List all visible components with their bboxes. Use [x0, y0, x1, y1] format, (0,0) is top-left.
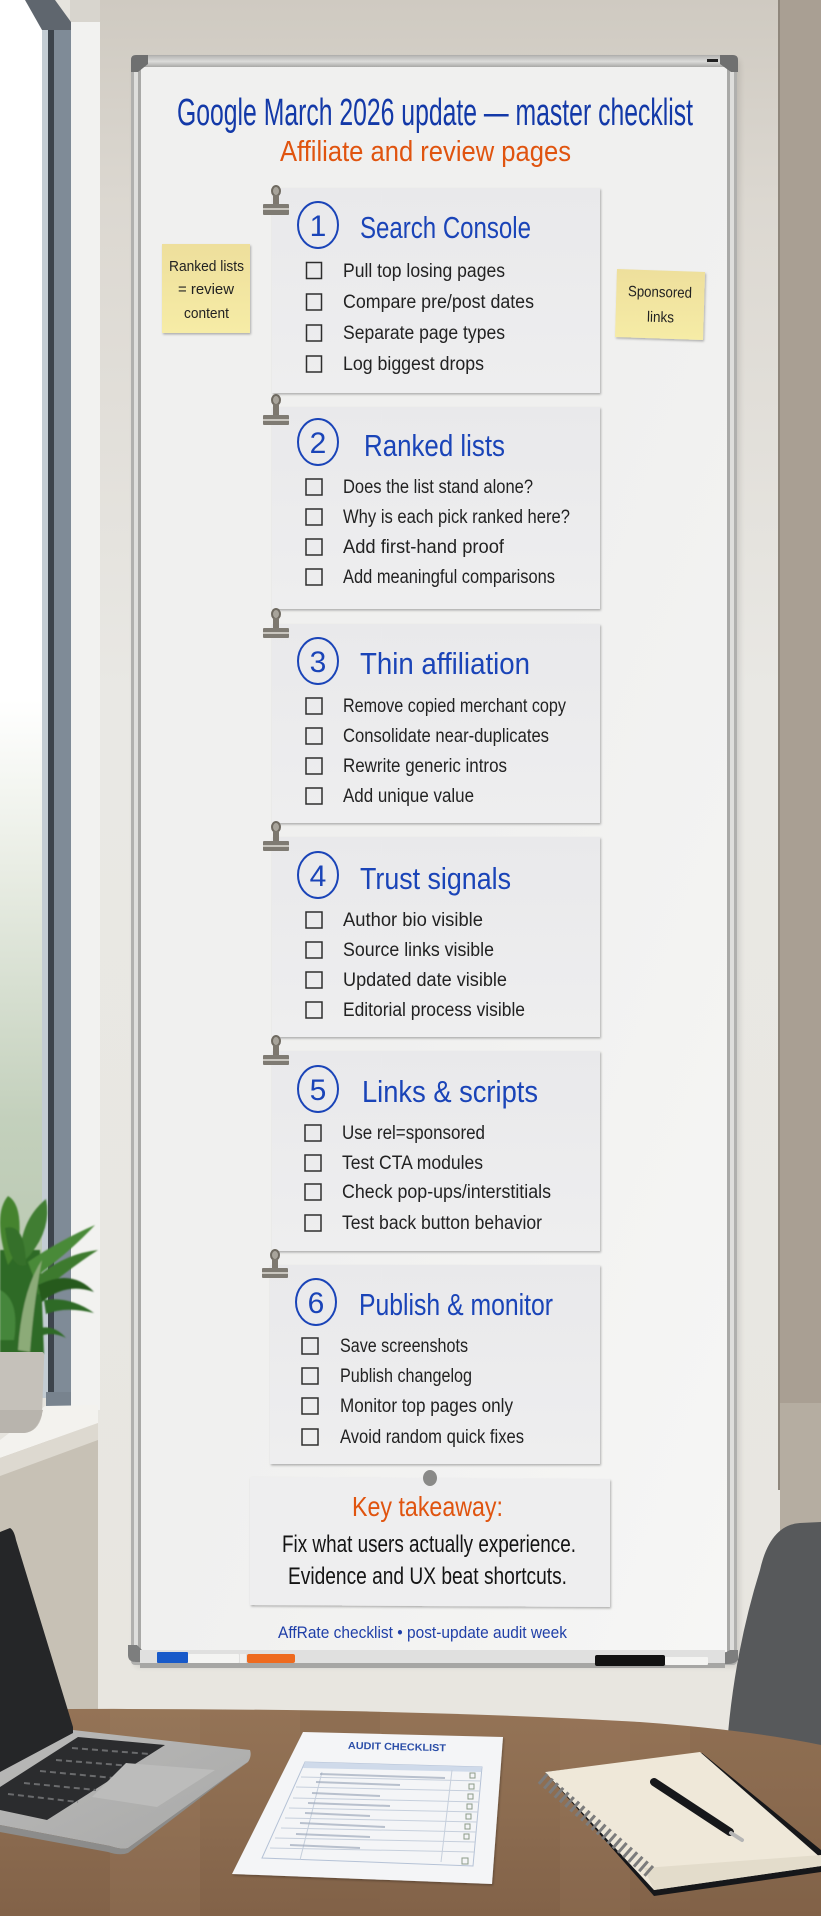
laptop screen — [0, 1528, 73, 1772]
checklist — [306, 261, 534, 375]
printed audit checklist: AUDIT CHECKLIST — [348, 1741, 446, 1754]
panel: key takeaway — [250, 1470, 610, 1607]
sticky note: ranked lists = review content: content — [184, 305, 230, 322]
laptop — [0, 1528, 251, 1854]
checklist: Save screenshots — [340, 1336, 468, 1357]
window sill and lower left wall — [0, 1405, 98, 1712]
checklist: Remove copied merchant copy — [343, 696, 566, 717]
sticky note: sponsored links — [615, 269, 705, 340]
sticky note: ranked lists = review content: = review — [178, 281, 234, 298]
printed audit checklist — [232, 1732, 503, 1884]
spiral notebook — [542, 1752, 821, 1896]
icon: binder clip — [263, 822, 289, 851]
checklist: Source links visible — [343, 940, 494, 961]
icon: binder clip — [263, 609, 289, 638]
checklist: Consolidate near-duplicates — [343, 726, 549, 747]
checklist: Compare pre/post dates — [343, 292, 534, 313]
panel: 1 Search Console — [263, 186, 600, 393]
heading: Thin affiliation — [360, 646, 530, 681]
checklist: Monitor top pages only — [340, 1396, 513, 1417]
sticky note: sponsored links: links — [647, 309, 674, 326]
checklist: Pull top losing pages — [343, 261, 505, 282]
checklist: Rewrite generic intros — [343, 756, 507, 777]
takeaway text — [282, 1531, 576, 1590]
checklist: Author bio visible — [343, 910, 483, 931]
marker tray with markers — [140, 1650, 725, 1668]
checklist: Add first-hand proof — [343, 537, 505, 558]
checklist: Test CTA modules — [342, 1153, 483, 1174]
panel: 5 Links & scripts — [263, 1036, 600, 1251]
panel: 3 Thin affiliation — [263, 609, 600, 823]
checklist: Check pop-ups/interstitials — [342, 1182, 551, 1203]
number badge 5: 5 — [310, 1074, 326, 1107]
takeaway text: Fix what users actually experience. — [282, 1531, 576, 1558]
number badge 6: 6 — [308, 1287, 324, 1320]
checklist: Updated date visible — [343, 970, 507, 991]
takeaway heading: Key takeaway: — [352, 1491, 503, 1522]
checklist: Why is each pick ranked here? — [343, 507, 570, 528]
number badge 3 — [298, 638, 338, 684]
sticky note: sponsored links: Sponsored — [628, 283, 692, 302]
checklist: Add unique value — [343, 786, 474, 807]
icon: binder clip — [263, 186, 289, 215]
window with frame — [0, 0, 100, 1410]
icon: potted plant — [0, 1196, 98, 1433]
subtitle: Affiliate and review pages — [280, 136, 571, 168]
marker: orange — [240, 1654, 295, 1663]
checklist: Test back button behavior — [342, 1213, 543, 1234]
heading: Links & scripts — [362, 1074, 538, 1109]
heading: Trust signals — [360, 861, 511, 896]
number badge 5 — [298, 1066, 338, 1112]
number badge 2: 2 — [310, 427, 326, 460]
checklist: Avoid random quick fixes — [340, 1427, 524, 1448]
icon: magnet pin — [423, 1470, 437, 1486]
laptop keyboard — [0, 1737, 165, 1820]
number badge 4: 4 — [310, 860, 326, 893]
checklist — [306, 696, 566, 807]
panel: 6 Publish & monitor — [262, 1250, 600, 1464]
office chair — [726, 1522, 821, 1760]
checklist: Publish changelog — [340, 1366, 472, 1387]
laptop trackpad — [92, 1763, 215, 1807]
number badge 4 — [298, 852, 338, 898]
checklist — [305, 1123, 551, 1234]
laptop base — [0, 1730, 251, 1849]
checklist — [306, 910, 525, 1021]
marker: black — [595, 1655, 708, 1666]
icon: binder clip — [263, 1036, 289, 1065]
checklist: Editorial process visible — [343, 1000, 525, 1021]
table — [0, 1705, 821, 1916]
checklist: Log biggest drops — [343, 354, 484, 375]
number badge 2 — [298, 419, 338, 465]
checklist: Use rel=sponsored — [342, 1123, 485, 1144]
icon: binder clip — [263, 395, 289, 425]
heading: Publish & monitor — [359, 1287, 553, 1322]
number badge 6 — [296, 1279, 336, 1325]
sticky note: ranked lists = review content: Ranked lists — [169, 258, 244, 275]
number badge 1 — [298, 202, 338, 248]
heading: Search Console — [360, 210, 531, 245]
footer note: AffRate checklist • post-update audit week — [278, 1623, 567, 1642]
checklist — [306, 477, 570, 588]
number badge 1: 1 — [310, 210, 326, 243]
marker: blue — [157, 1652, 239, 1663]
whiteboard — [128, 55, 740, 1667]
number badge 3: 3 — [310, 646, 326, 679]
panel: 2 Ranked lists — [263, 395, 600, 609]
checklist: Add meaningful comparisons — [343, 567, 555, 588]
takeaway text: Evidence and UX beat shortcuts. — [288, 1563, 567, 1590]
panel: 4 Trust signals — [263, 822, 600, 1037]
heading: Ranked lists — [364, 428, 505, 463]
checklist: Does the list stand alone? — [343, 477, 533, 498]
pen — [654, 1782, 742, 1840]
checklist — [302, 1336, 524, 1448]
icon: binder clip — [262, 1250, 288, 1278]
sticky note: ranked lists = review content — [162, 244, 250, 333]
checklist: Separate page types — [343, 323, 505, 344]
